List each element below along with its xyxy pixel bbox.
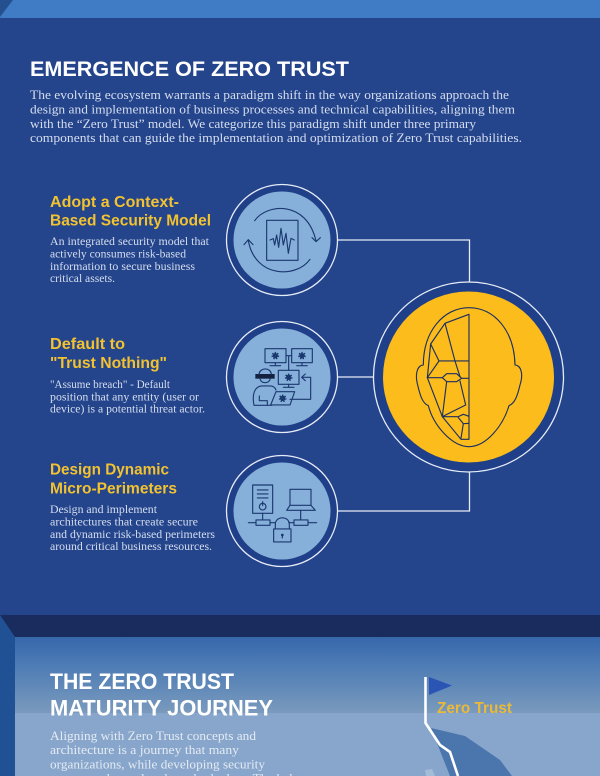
text block: micro-perimeters description: architectures that create secure — [50, 516, 198, 528]
top band — [0, 0, 600, 18]
heading: design dynamic micro-perimeters — [50, 462, 177, 498]
journey text block: Aligning with Zero Trust concepts and — [50, 728, 256, 743]
journey heading: MATURITY JOURNEY — [50, 696, 273, 720]
mountain — [431, 728, 512, 776]
intro paragraph: components that can guide the implementation and optimization of Zero Trust capabilities. — [30, 130, 522, 145]
text block: context-based description: An integrated security model that — [50, 236, 210, 248]
journey heading — [50, 669, 273, 720]
heading: default to trust nothing — [50, 336, 167, 372]
heading: default to trust nothing: "Trust Nothing" — [50, 355, 167, 372]
main panel background — [0, 18, 600, 615]
dark divider band — [0, 615, 600, 637]
text block: context-based description: information to secure business — [50, 261, 196, 273]
intro paragraph: with the “Zero Trust” model. We categorize this paradigm shift under three primary — [30, 116, 477, 131]
heading: default to trust nothing: Default to — [50, 336, 125, 353]
journey text block: organizations, while developing security — [50, 756, 265, 772]
panel: context-based security model text — [50, 194, 211, 285]
text block: micro-perimeters description: Design and implement — [50, 504, 158, 516]
heading: design dynamic micro-perimeters: Micro-Perimeters — [50, 480, 177, 498]
flag — [429, 677, 452, 695]
journey heading: THE ZERO TRUST — [50, 669, 235, 694]
label: zero trust: Zero Trust — [437, 700, 512, 717]
icon: context-based security circle — [226, 184, 338, 296]
icon: zero trust face — [374, 282, 564, 472]
icon: trust nothing circle — [226, 322, 338, 432]
intro paragraph: design and implementation of business processes and technical capabilities, aligning them — [30, 102, 515, 116]
icon: micro-perimeters circle — [226, 456, 338, 566]
heading: adopt a context-based security model: Based Security Model — [50, 212, 211, 230]
text block: context-based description — [50, 236, 210, 285]
path to summit — [426, 677, 458, 776]
text block: context-based description: actively consumes risk-based — [50, 248, 186, 260]
panel: trust nothing text — [50, 336, 205, 416]
heading: adopt a context-based security model — [50, 194, 211, 230]
text block: micro-perimeters description — [50, 504, 216, 553]
heading: design dynamic micro-perimeters: Design Dynamic — [50, 462, 169, 478]
text block: micro-perimeters description: around critical business resources. — [50, 541, 212, 553]
journey text block: architecture is a journey that many — [50, 742, 240, 757]
text block: trust nothing description: device) is a potential threat actor. — [50, 404, 205, 416]
connector lines — [338, 240, 470, 511]
text block: trust nothing description: "Assume breach" - Default — [50, 379, 171, 391]
intro paragraph: The evolving ecosystem warrants a paradigm shift in the way organizations approach the — [30, 87, 509, 102]
text block: trust nothing description: position that any entity (user or — [50, 392, 199, 404]
text block: context-based description: critical assets. — [50, 273, 115, 285]
mountain snow — [425, 769, 435, 776]
text block: micro-perimeters description: and dynamic risk-based perimeters — [50, 529, 216, 541]
title: EMERGENCE OF ZERO TRUST — [30, 58, 349, 81]
intro paragraph — [30, 87, 522, 145]
panel: micro-perimeters text — [50, 462, 216, 553]
journey text block — [50, 728, 310, 776]
panel: maturity journey background — [0, 615, 600, 776]
text block: trust nothing description — [50, 379, 205, 416]
heading: adopt a context-based security model: Adopt a Context- — [50, 194, 179, 211]
